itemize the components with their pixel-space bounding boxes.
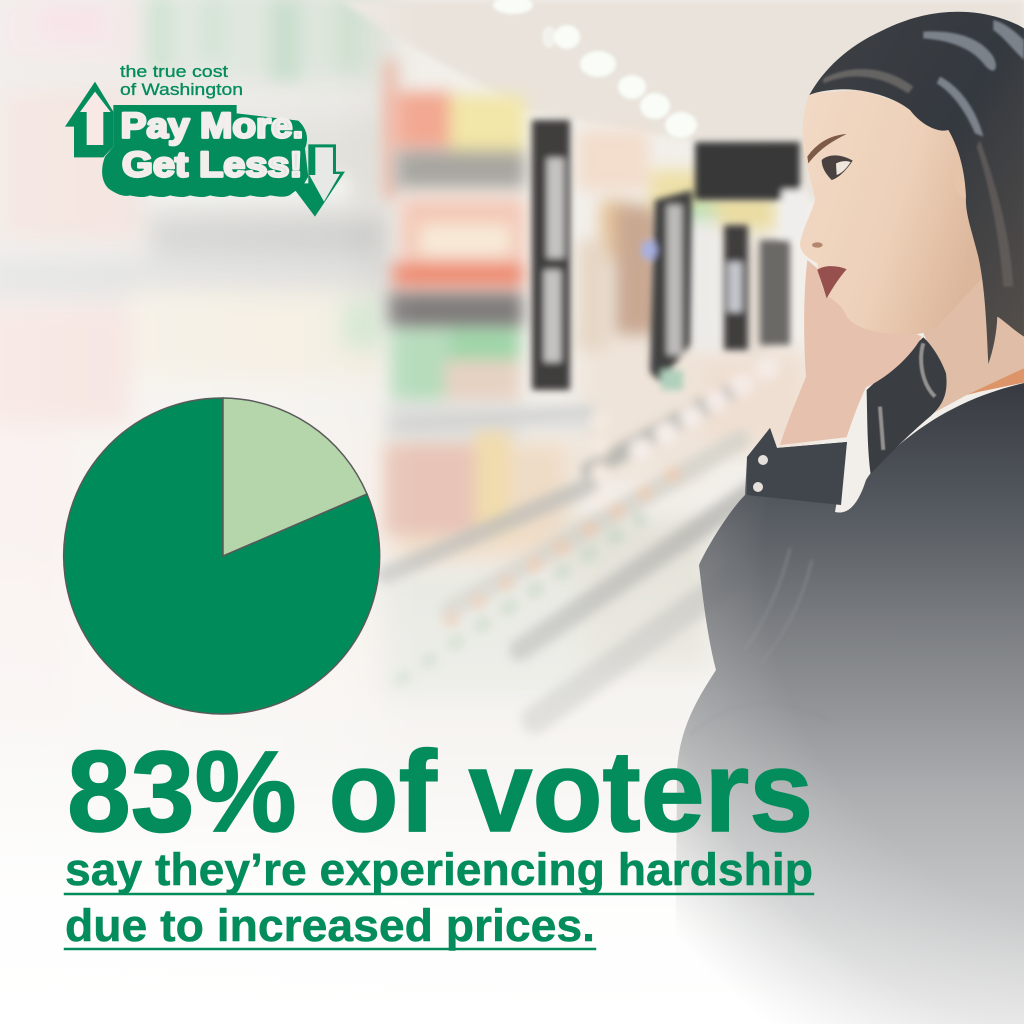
- lips: [817, 266, 847, 298]
- nostril: [812, 242, 823, 248]
- blurred bottles on lower shelves: [385, 360, 780, 720]
- eyebrow: [807, 134, 847, 163]
- face: [800, 90, 993, 335]
- hair shine: [823, 20, 1024, 287]
- subheading line 2: due to increased prices.: [65, 900, 595, 951]
- 83 percent slice: [64, 398, 380, 714]
- woman's torso and sleeve: [675, 383, 1024, 1024]
- eye: [822, 155, 853, 180]
- hand and forearm: [780, 260, 922, 445]
- up arrow: [65, 82, 113, 157]
- neck: [923, 187, 1024, 415]
- down arrow: [290, 144, 345, 217]
- logo tagline: [120, 63, 243, 99]
- subheading with underlines: [64, 844, 814, 951]
- headline: 83% of voters: [67, 728, 813, 856]
- long hair: [809, 12, 1024, 364]
- pie chart: 83 percent: [64, 398, 380, 714]
- lower hair: [867, 337, 947, 474]
- logo wordmark: [121, 106, 303, 185]
- logo tagline: of Washington: [120, 81, 243, 99]
- ceiling lights: [493, 0, 697, 138]
- top left shelf stock: [40, 0, 395, 200]
- orange collar: [967, 368, 1024, 395]
- subheading line 1: say they’re experiencing hardship: [65, 844, 813, 895]
- logo wordmark: Pay More.: [121, 106, 303, 145]
- woman looking at shelves: [675, 12, 1024, 1024]
- ceiling: [340, 0, 1024, 200]
- logo tagline: the true cost: [120, 63, 228, 81]
- logo green backing: [102, 105, 308, 197]
- 17 percent slice: [223, 398, 367, 556]
- sleeve cuff: [747, 428, 847, 505]
- logo wordmark: Get Less!: [122, 146, 303, 185]
- ear: [954, 140, 967, 197]
- logo: Pay More. Get Less.: [65, 63, 345, 217]
